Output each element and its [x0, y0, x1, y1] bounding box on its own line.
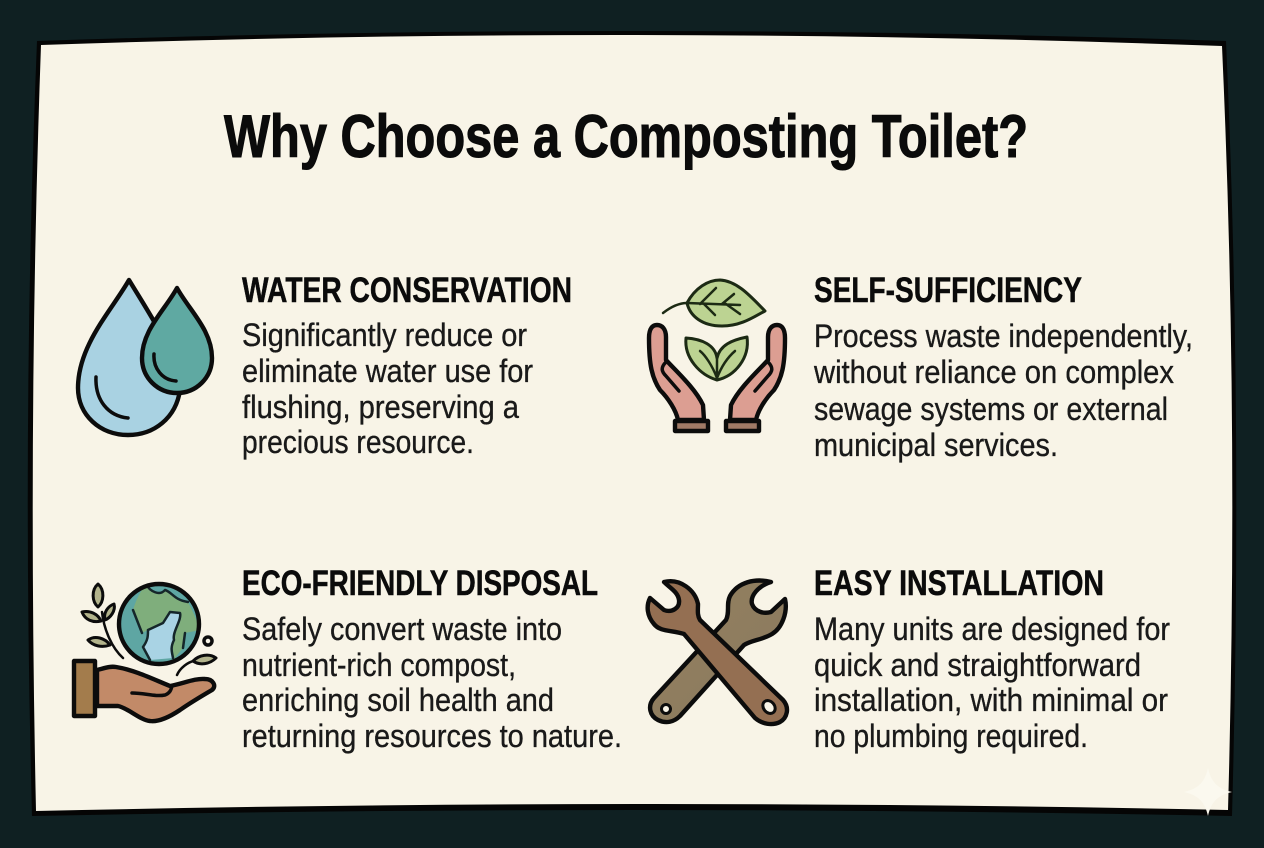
icon: left hand — [649, 325, 708, 431]
text block: self-sufficiency — [813, 318, 1193, 463]
icon: globe — [119, 584, 200, 664]
heading: eco-friendly disposal: ECO-FRIENDLY DISPOSAL — [242, 564, 598, 603]
panel: water conservation — [78, 271, 572, 460]
text block: water conservation — [242, 317, 533, 460]
panel: eco-friendly disposal — [74, 564, 622, 754]
icon: small leaf — [177, 655, 216, 675]
text block: easy installation — [814, 611, 1170, 754]
heading: easy installation: EASY INSTALLATION — [814, 564, 1104, 603]
icon: sparkle watermark — [1184, 768, 1232, 816]
text block: eco-friendly disposal: returning resources to nature. — [242, 718, 622, 754]
text block: eco-friendly disposal: Safely convert waste into — [242, 611, 562, 647]
icon: top leaf — [663, 280, 765, 326]
text block: self-sufficiency: municipal services. — [814, 427, 1058, 463]
text block: eco-friendly disposal: enriching soil health and — [242, 682, 554, 718]
text block: easy installation: Many units are designed for — [814, 611, 1170, 647]
panel: easy installation — [648, 564, 1170, 754]
icon: earth in hand — [74, 584, 216, 721]
icon: small circle — [204, 637, 212, 645]
text block: water conservation: flushing, preserving a — [242, 389, 520, 425]
icon: back wrench — [650, 581, 786, 722]
text block: easy installation: no plumbing required. — [814, 718, 1088, 754]
heading: self-sufficiency: SELF-SUFFICIENCY — [814, 271, 1082, 310]
text block: self-sufficiency: sewage systems or external — [814, 391, 1168, 427]
heading: water conservation: WATER CONSERVATION — [242, 271, 572, 310]
icon: right hand — [726, 325, 785, 431]
text block: easy installation: quick and straightforward — [814, 647, 1141, 683]
title: Why Choose a Composting Toilet? — [224, 103, 1028, 170]
text block: easy installation: installation, with minimal or — [814, 682, 1168, 718]
text block: water conservation: eliminate water use for — [242, 353, 533, 389]
icon: front wrench — [648, 581, 787, 724]
text block: water conservation: precious resource. — [242, 424, 474, 460]
text block: self-sufficiency: without reliance on complex — [813, 354, 1174, 390]
text block: water conservation: Significantly reduce or — [242, 317, 527, 353]
text block: eco-friendly disposal — [242, 611, 622, 754]
icon: hands holding leaves — [649, 280, 785, 431]
icon: water drops — [78, 280, 212, 435]
panel: self-sufficiency — [649, 271, 1193, 463]
icon: lower leaves — [686, 337, 747, 380]
text block: eco-friendly disposal: nutrient-rich compost, — [242, 647, 516, 683]
icon: olive sprig — [82, 584, 123, 658]
icon: open hand — [74, 661, 214, 721]
text block: self-sufficiency: Process waste independently, — [814, 318, 1193, 354]
icon: crossed wrenches — [648, 581, 787, 724]
